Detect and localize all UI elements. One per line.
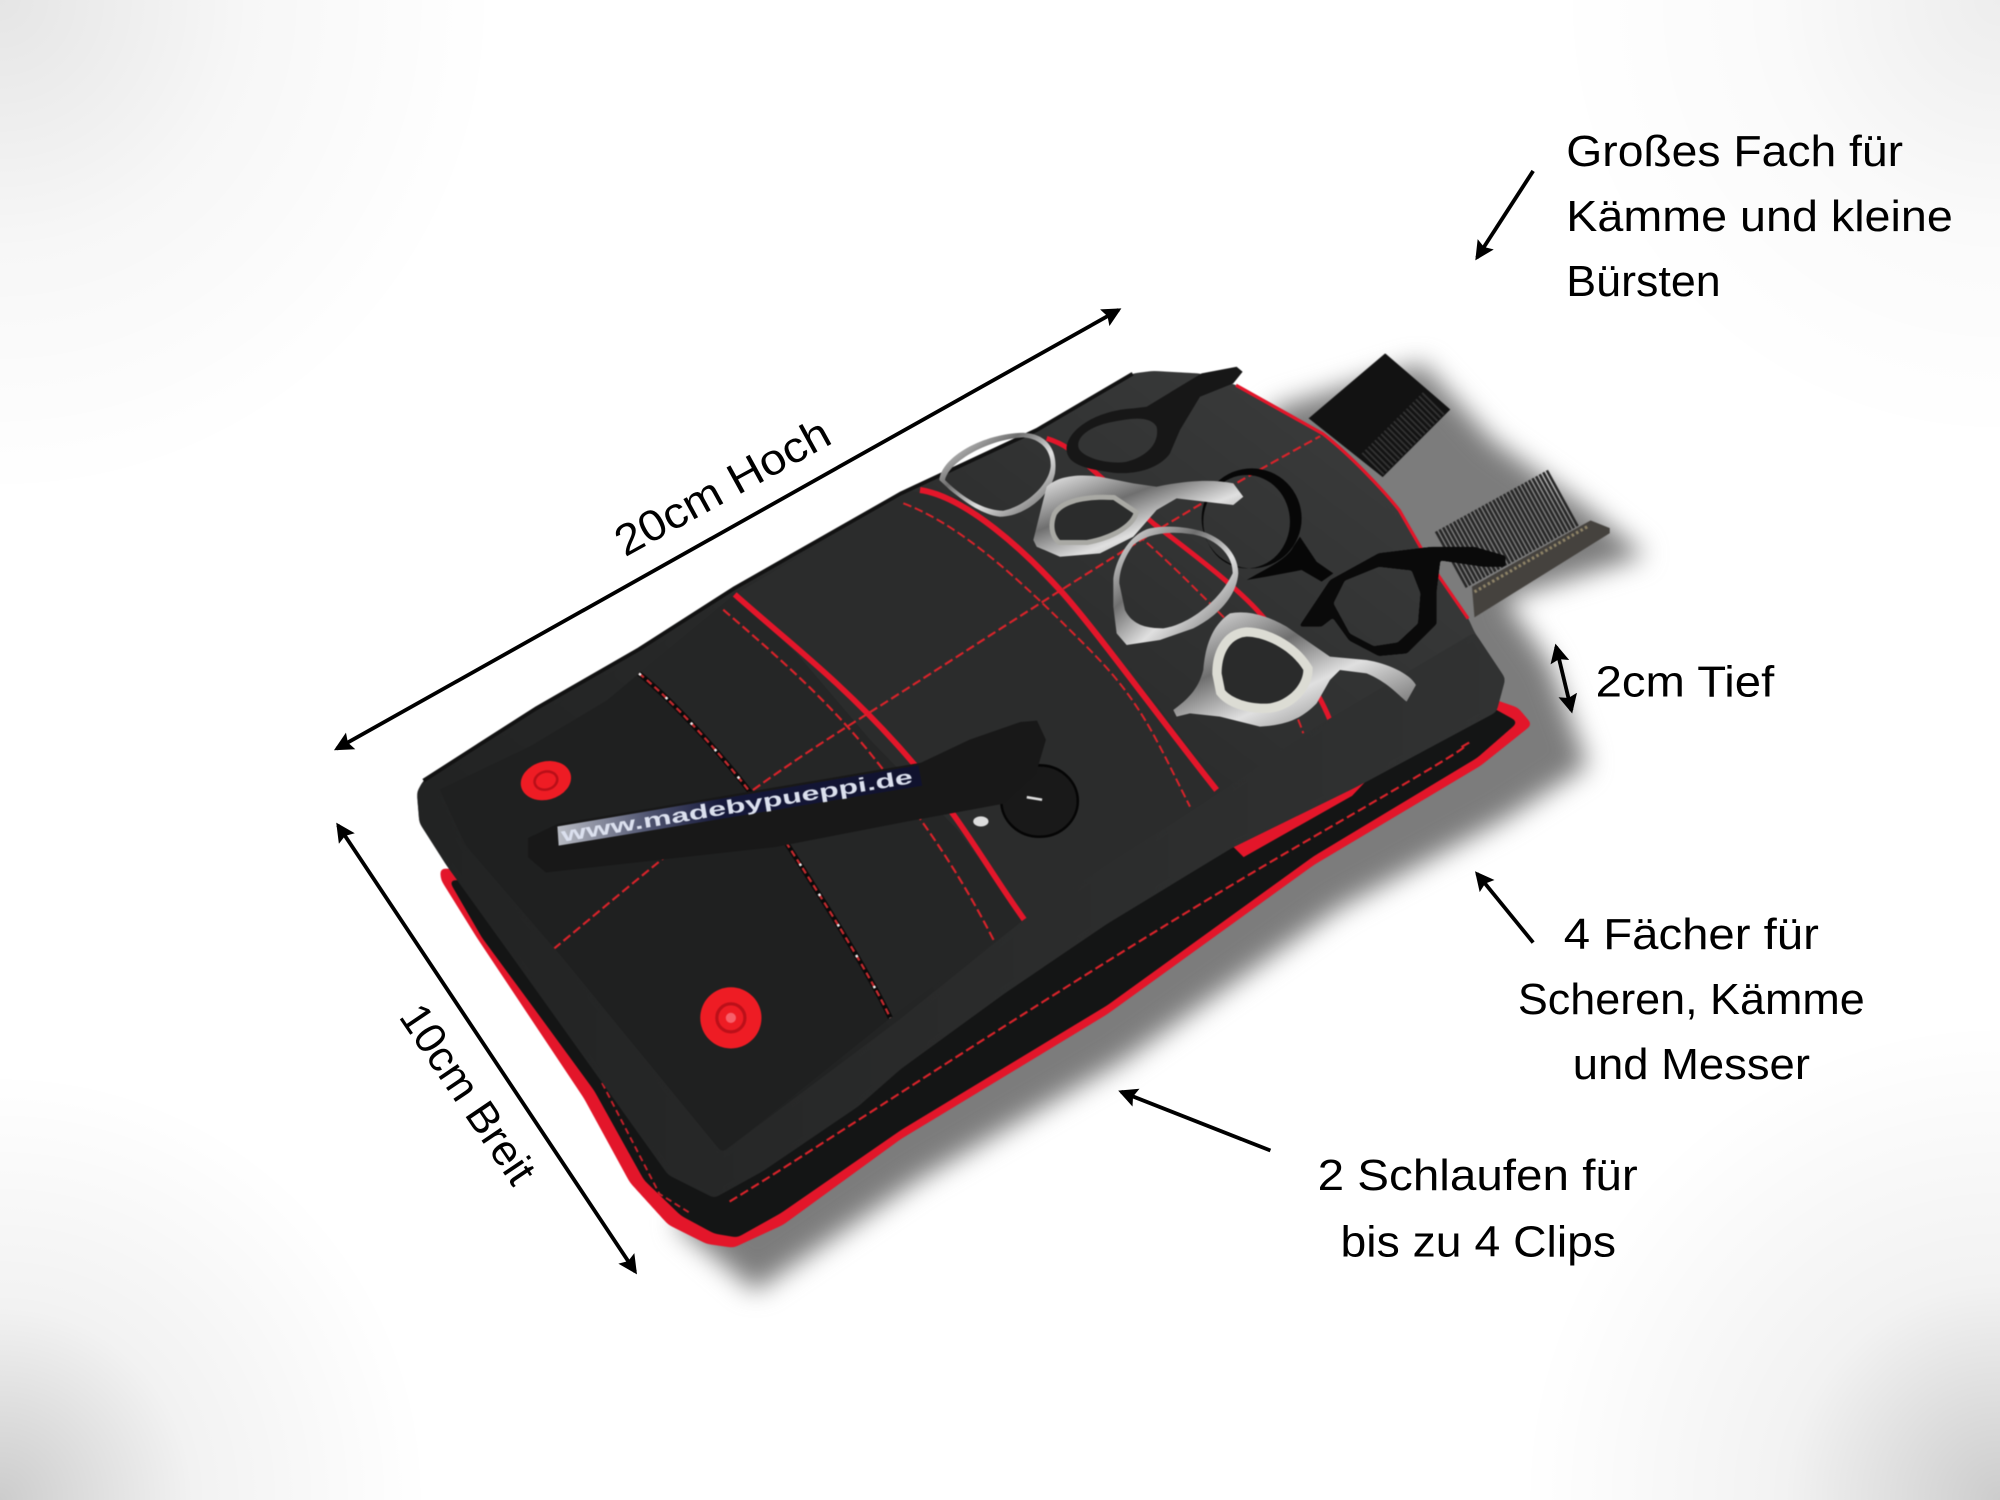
- scissors: thin silver ring: [939, 433, 1056, 517]
- arrow: height dimension: [337, 310, 1119, 749]
- panel: front pocket with snap buttons: [440, 673, 890, 1153]
- comb: grey comb with teeth: [1450, 497, 1610, 617]
- stitching and piping: upper compartments: [1047, 438, 1330, 733]
- piping: large pocket edge: [903, 490, 1217, 807]
- arrow: clip loops: [1121, 1092, 1270, 1151]
- panel: middle pocket: [639, 594, 1024, 1018]
- text: clip loops: bis zu 4 Clips: [1341, 1218, 1616, 1266]
- red edge of the back compartment: [1236, 385, 1468, 619]
- comb: black comb at the back: [1309, 353, 1450, 477]
- label: depth: 2cm Tief: [1596, 658, 1775, 706]
- logo text on the clip: www.madebypueppi.de: [558, 766, 914, 847]
- panel: large curved pocket: [735, 491, 1221, 922]
- icon: snap button bottom: [700, 987, 761, 1048]
- red patch under the rim: [1231, 776, 1371, 857]
- label: height: 20cm Hoch: [607, 409, 839, 566]
- text: four compartments: Scheren, Kämme: [1518, 976, 1865, 1024]
- cross stitching line: [554, 436, 1320, 949]
- drop shadow of the pouch: [676, 364, 1645, 1291]
- hair clip with printed logo: [528, 721, 1078, 872]
- pouch illustration: [417, 353, 1610, 1247]
- text: clip loops: 2 Schlaufen für: [1318, 1152, 1638, 1200]
- dark top edge: [423, 374, 1133, 781]
- scissors: silver handle front: [1173, 612, 1416, 727]
- text: four compartments: 4 Fächer für: [1564, 911, 1819, 959]
- pouch: red-edged back layer with belt loops: [440, 699, 1532, 1247]
- text: large compartment: Kämme und kleine: [1566, 193, 1953, 241]
- pouch: main leather body: [417, 371, 1505, 1198]
- pouch rim: [417, 633, 1505, 1198]
- arrow: width dimension: [338, 825, 635, 1272]
- text: clip loops: [1318, 1152, 1638, 1266]
- text: large compartment: [1566, 128, 1953, 306]
- scissors: thick silver handle: [1033, 475, 1243, 557]
- arrow: depth dimension: [1556, 647, 1571, 710]
- side stitching: [602, 1083, 690, 1213]
- text: large compartment: Bürsten: [1566, 258, 1721, 306]
- icon: snap button top: [516, 756, 576, 806]
- scissors: black handle at the top: [1067, 367, 1243, 473]
- arrow: large compartment: [1477, 171, 1533, 258]
- text: large compartment: Großes Fach für: [1566, 128, 1903, 176]
- scissors: black ring right: [1300, 547, 1505, 656]
- stitching on the belt loops: [730, 741, 1472, 1202]
- text: four compartments: [1518, 911, 1865, 1089]
- text: four compartments: und Messer: [1573, 1041, 1810, 1089]
- scissors: silver ring centre: [1113, 527, 1238, 645]
- label: width: 10cm Breit: [390, 995, 545, 1193]
- arrow: four compartments: [1477, 874, 1533, 943]
- scissors: black ring centre: [1202, 468, 1333, 582]
